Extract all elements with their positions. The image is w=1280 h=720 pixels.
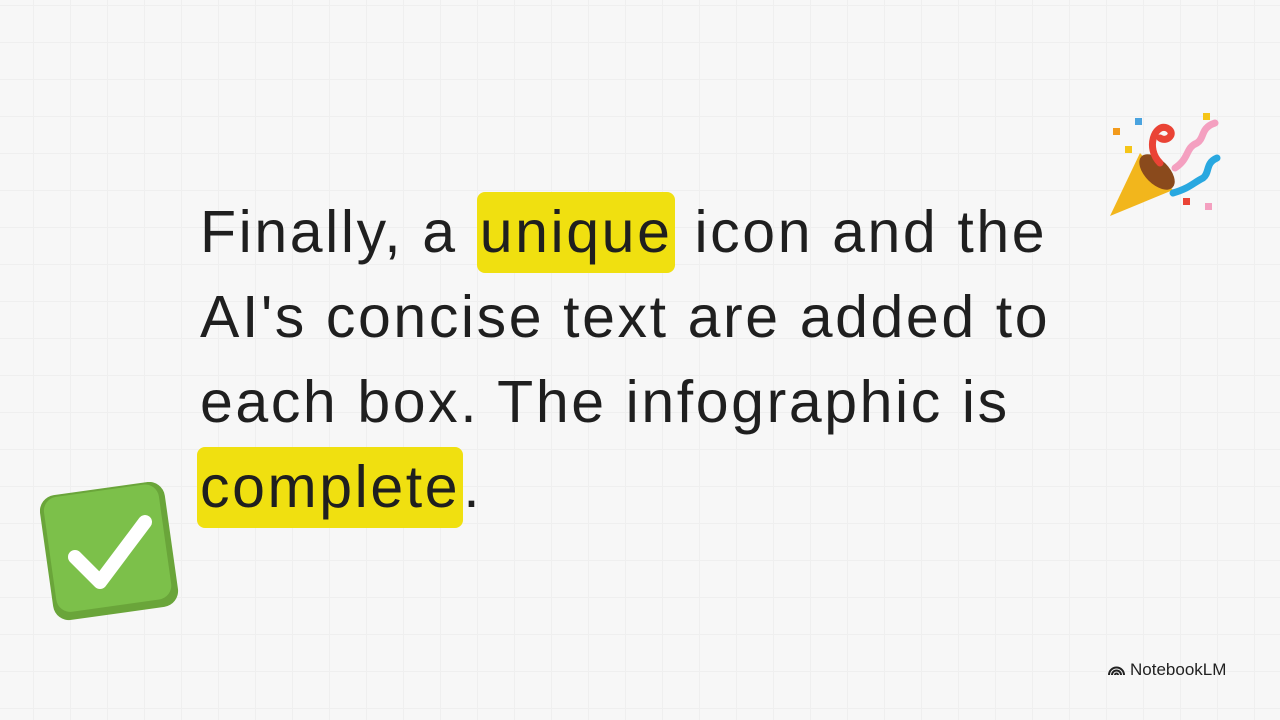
icon: check mark box xyxy=(40,482,178,620)
logo: NotebookLM: NotebookLM xyxy=(1130,660,1226,679)
main text block: Finally, a unique icon and the xyxy=(200,199,1047,265)
main text block xyxy=(197,192,1050,528)
main text block: complete. xyxy=(200,454,482,520)
main text block: each box. The infographic is xyxy=(200,369,1010,435)
icon: party popper xyxy=(1110,113,1220,216)
main text block: AI's concise text are added to xyxy=(200,284,1050,350)
